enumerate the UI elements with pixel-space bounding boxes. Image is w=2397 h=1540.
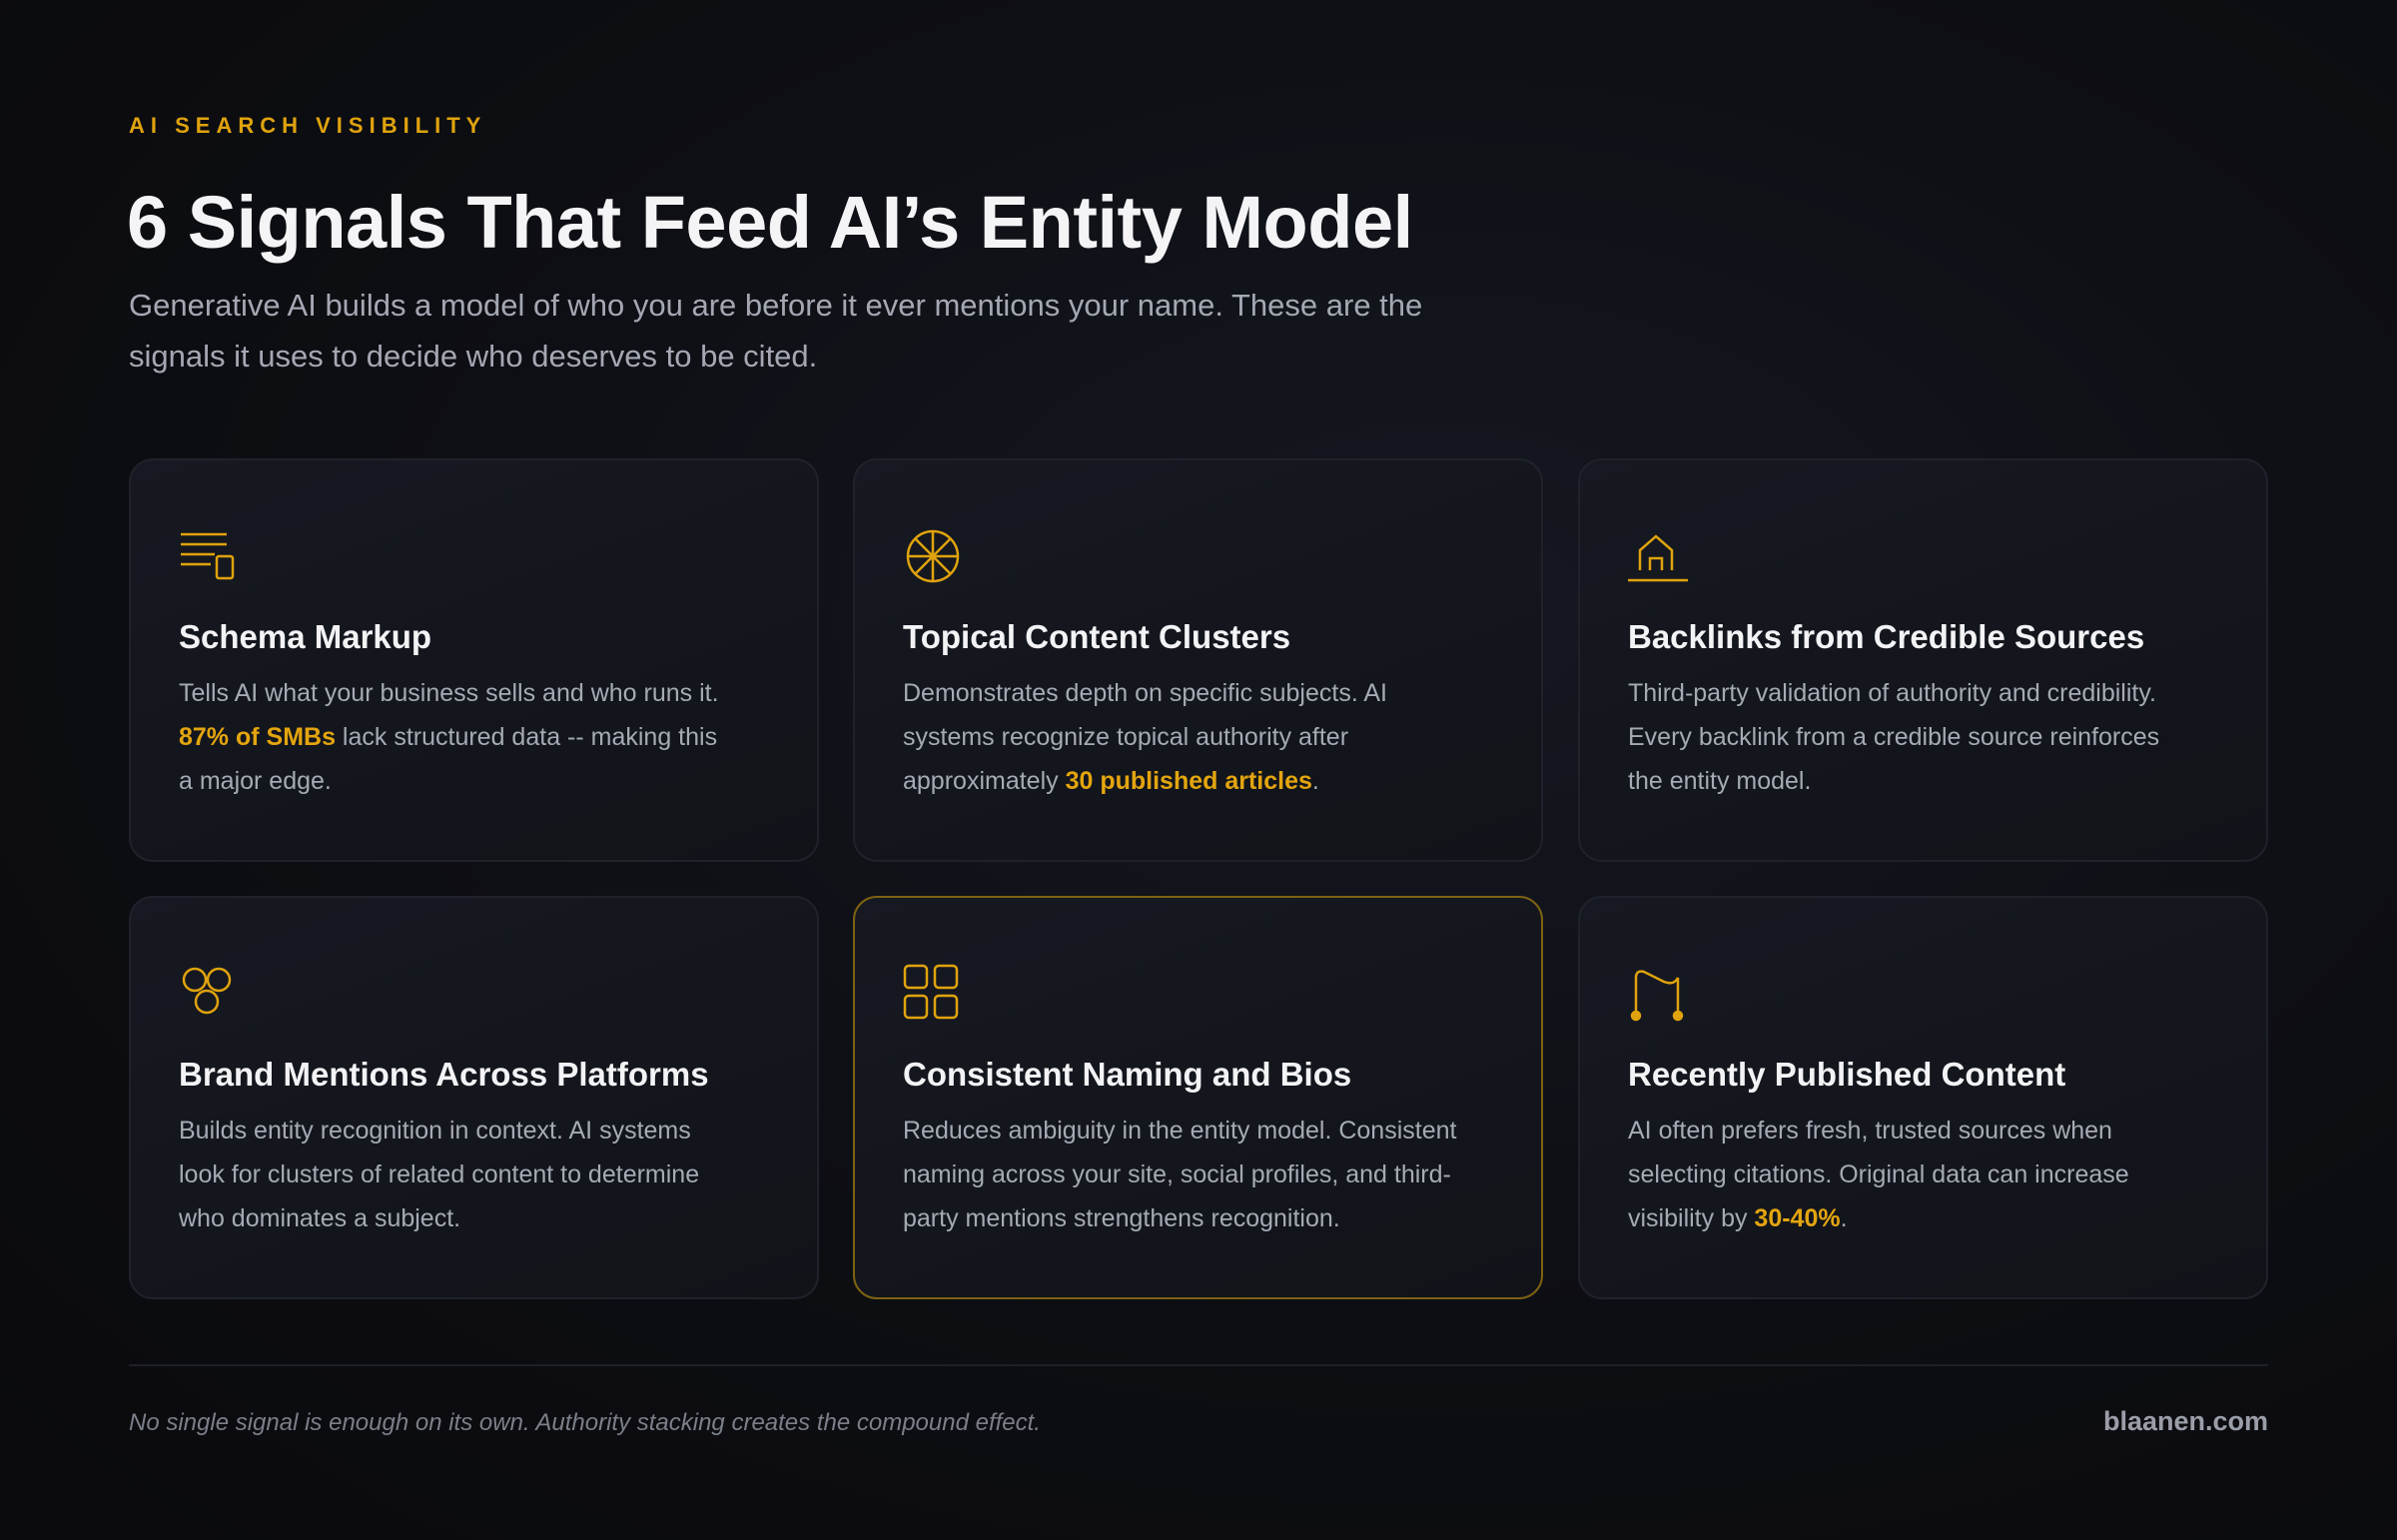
icon: circles [182,967,232,1015]
subtitle: Generative AI builds a model of who you are before it ever mentions your name. These are the signals it uses to decide who deserves to be cited. [129,288,1422,374]
panel: backlinks [1578,458,2268,862]
card body: Third-party validation of authority and credibility. Every backlink from a credible source reinforces the entity model. [1628,679,2159,795]
card title: Backlinks from Credible Sources [1628,618,2144,655]
icon: grid [903,965,959,1019]
icon: house [1628,535,1688,581]
icon: schema [181,533,234,579]
panel: recent content [1578,896,2268,1299]
footer note: No single signal is enough on its own. Authority stacking creates the compound effect. [129,1409,1041,1436]
card title: Consistent Naming and Bios [903,1056,1351,1093]
card title: Schema Markup [179,618,431,655]
panel: topical clusters [853,458,1543,862]
card title: Brand Mentions Across Platforms [179,1056,709,1093]
panel: schema markup [129,458,819,862]
panel: brand mentions [129,896,819,1299]
kicker: AI SEARCH VISIBILITY [129,113,486,138]
card body: Reduces ambiguity in the entity model. Consistent naming across your site, social profiles, and third-party mentions strengthens recognition. [903,1117,1456,1232]
icon: wheel [907,529,959,583]
card body: Tells AI what your business sells and who runs it. 87% of SMBs lack structured data -- making this a major edge. [179,679,719,795]
card body: AI often prefers fresh, trusted sources when selecting citations. Original data can increase visibility by 30-40%. [1628,1117,2129,1232]
card body: Demonstrates depth on specific subjects. AI systems recognize topical authority after approximately 30 published articles. [903,679,1387,795]
card title: Topical Content Clusters [903,618,1290,655]
brand: blaanen.com [2103,1406,2268,1436]
card body: Builds entity recognition in context. AI systems look for clusters of related content to determine who dominates a subject. [179,1117,699,1232]
card title: Recently Published Content [1628,1056,2065,1093]
title: 6 Signals That Feed AI’s Entity Model [127,181,1413,264]
icon: path [1630,970,1684,1021]
panel: consistent naming [853,896,1543,1299]
